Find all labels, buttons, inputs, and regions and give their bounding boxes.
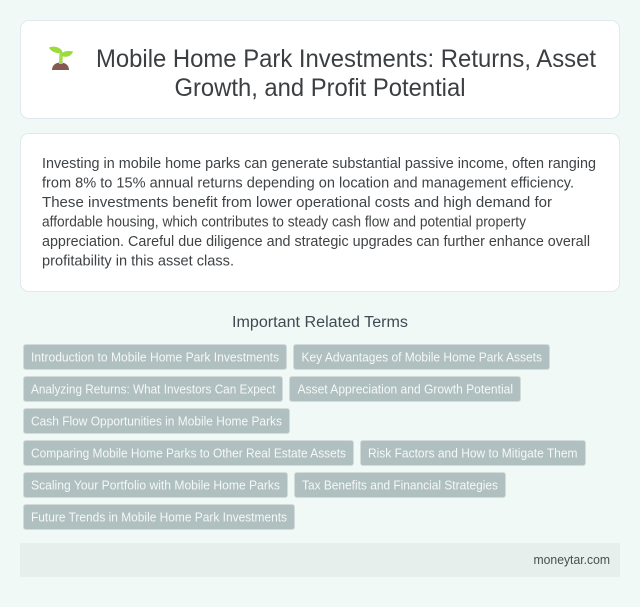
tag: key advantages	[294, 344, 550, 370]
tag: cash flow: Cash Flow Opportunities in Mobile Home Parks	[31, 414, 282, 428]
tag: introduction: Introduction to Mobile Home Park Investments	[31, 350, 279, 364]
tag: risk factors	[360, 440, 586, 466]
text block: summary: Investing in mobile home parks can generate substantial passive income, often ranging	[42, 156, 596, 172]
text block: summary: profitability in this asset class.	[42, 254, 234, 270]
title	[96, 45, 596, 102]
tag: tax benefits: Tax Benefits and Financial Strategies	[302, 478, 498, 492]
tag: future trends	[24, 504, 294, 530]
text block: summary	[42, 156, 596, 270]
tag: introduction	[24, 344, 286, 370]
title: Growth, and Profit Potential	[174, 74, 466, 102]
tag: cash flow	[24, 408, 290, 434]
text block: summary: affordable housing, which contributes to steady cash flow and potential property	[42, 214, 527, 230]
tag: future trends: Future Trends in Mobile Home Park Investments	[31, 510, 287, 524]
text block: summary: from 8% to 15% annual returns depending on location and management efficiency.	[42, 176, 574, 192]
tag list: related terms	[24, 344, 586, 530]
panel: title card	[20, 20, 620, 118]
tag: tax benefits	[294, 472, 506, 498]
tag: analyzing returns: Analyzing Returns: What Investors Can Expect	[31, 382, 276, 396]
footer	[20, 543, 620, 577]
text block: summary: These investments benefit from lower operational costs and high demand for	[42, 195, 552, 211]
icon: sprout	[49, 47, 73, 70]
footer: site name: moneytar.com	[534, 553, 610, 567]
title: Mobile Home Park Investments: Returns, Asset	[96, 45, 596, 73]
text block: summary: appreciation. Careful due diligence and strategic upgrades can further enhance overall	[42, 234, 590, 250]
tag: asset appreciation	[290, 376, 520, 402]
tag: analyzing returns	[24, 376, 282, 402]
tag: comparing: Comparing Mobile Home Parks to Other Real Estate Assets	[31, 446, 346, 460]
heading: related terms: Important Related Terms	[232, 314, 408, 331]
tag: key advantages: Key Advantages of Mobile Home Park Assets	[302, 350, 542, 364]
tag: asset appreciation: Asset Appreciation and Growth Potential	[298, 382, 513, 396]
tag: scaling: Scaling Your Portfolio with Mobile Home Parks	[31, 478, 280, 492]
tag: scaling	[24, 472, 288, 498]
tag: comparing	[24, 440, 354, 466]
panel: summary card	[20, 134, 620, 292]
tag: risk factors: Risk Factors and How to Mitigate Them	[368, 446, 578, 460]
